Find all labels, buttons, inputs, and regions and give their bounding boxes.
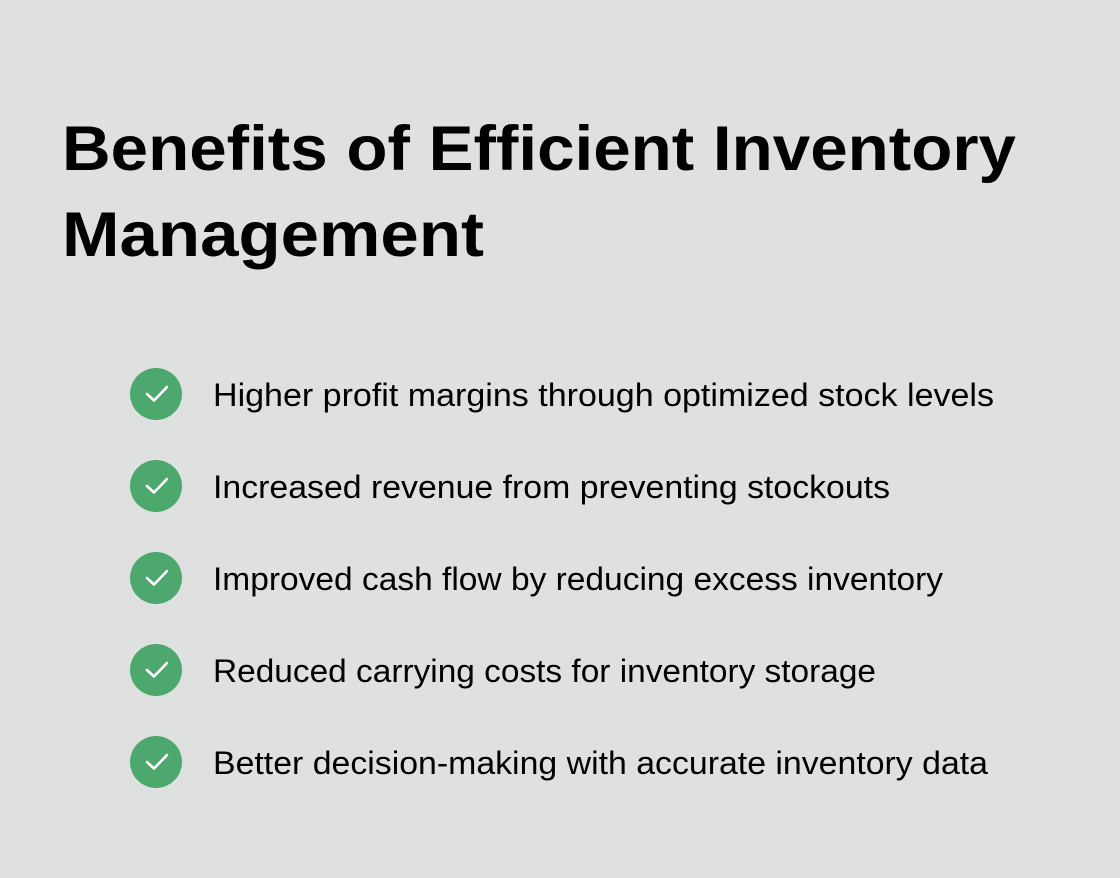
benefit: increased revenue: Increased revenue from preventing stockouts bbox=[213, 469, 890, 505]
benefit: better decision-making: Better decision-making with accurate inventory data bbox=[213, 745, 988, 781]
benefit: higher profit margins bbox=[130, 368, 994, 420]
title: Management bbox=[62, 200, 484, 270]
benefits list bbox=[130, 368, 994, 788]
benefit: higher profit margins: Higher profit margins through optimized stock levels bbox=[213, 377, 994, 413]
benefit: improved cash flow: Improved cash flow by reducing excess inventory bbox=[213, 561, 943, 597]
title: Benefits of Efficient Inventory bbox=[62, 114, 1016, 184]
title bbox=[62, 114, 1016, 270]
benefit: improved cash flow bbox=[130, 552, 943, 604]
benefit: reduced carrying costs: Reduced carrying costs for inventory storage bbox=[213, 653, 876, 689]
benefit: increased revenue bbox=[130, 460, 890, 512]
benefit: better decision-making bbox=[130, 736, 988, 788]
benefit: reduced carrying costs bbox=[130, 644, 876, 696]
